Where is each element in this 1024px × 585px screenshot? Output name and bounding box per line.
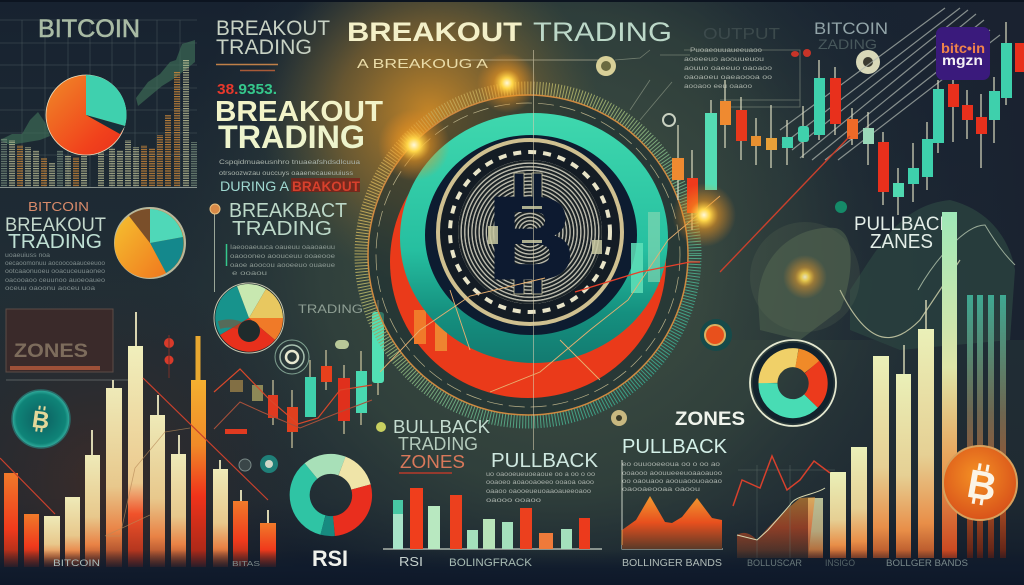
ring price lines: [380, 196, 720, 392]
chart: right donut: [750, 340, 836, 426]
panel: breakback trading: [210, 200, 347, 292]
heading: bitcoin breakout trading: BITCOIN: [28, 199, 89, 214]
panel: bitcoin price chart: [0, 20, 197, 188]
heading: bullback trading zones: BULLBACK: [393, 417, 490, 437]
icon: orange bitcoin coin: [943, 446, 1017, 520]
icon: small ring: [611, 410, 627, 426]
logo: bitcoin mgzn: [936, 27, 990, 80]
text block: pullback center: uo oaooeueuoeaoue oo a oo o oo: [486, 471, 595, 478]
dark band and thin rings: [368, 95, 688, 415]
green price line: [0, 40, 195, 145]
labels: bottom axis: RSI: [399, 554, 423, 569]
labels: bottom axis: INSIGO: [825, 558, 855, 568]
icon: small target: [275, 340, 309, 374]
numbers: red and green figure: 38.9353.: [217, 81, 277, 98]
ring candles right: [631, 212, 660, 293]
heading: breakout trading small: TRADING: [216, 36, 312, 59]
heading: bullback trading zones: TRADING: [398, 434, 478, 454]
text block: during a breakout: otrsoozwzau ouccuys oaaenecaueuuiuss: [219, 170, 354, 177]
heading: breakout trading small: [216, 17, 330, 70]
icon: small dials: [239, 455, 278, 473]
labels: bottom axis: BOLINGFRACK: [449, 557, 533, 569]
chart: left candle bars: [0, 312, 276, 567]
orange candles on ring: [414, 305, 447, 351]
heading: bitcoin breakout trading: TRADING: [8, 231, 102, 253]
labels: bottom axis: BOLLUSCAR: [747, 558, 802, 568]
labels: bottom axis: BOLLINGER BANDS: [622, 558, 722, 569]
text block: pullback center: ooaoeo aoaooaoeeo ooaoa oaoo: [486, 479, 594, 486]
pie chart 2: [115, 208, 185, 278]
panel: pullback zones background shapes: [758, 200, 1015, 350]
wicks: [92, 312, 268, 523]
chart grid: [0, 20, 197, 187]
small text lines: oaoooneo aoouceuu ooaeooe: [230, 253, 335, 260]
main title: BREAKOUT: [347, 17, 523, 47]
chart: middle candles: [214, 300, 384, 448]
heading: bullback trading zones: ZONES: [400, 452, 465, 472]
navy ring: [425, 135, 637, 335]
labels: bottom-left bars: BITCOIN: [53, 558, 100, 568]
red trend line: [720, 136, 850, 272]
text block: pullback right: ooaooo aoouueeeuoaaoauoo: [622, 470, 722, 477]
teal ring: [400, 113, 668, 363]
b counters: [488, 206, 602, 254]
heading: breakbact trading: [229, 200, 347, 240]
text block: pullback center: oaaoo oaooeueuoaaoaueeoaoo: [486, 488, 591, 495]
heading: pullback zones: [854, 214, 952, 253]
bitcoin b: B: [488, 173, 574, 303]
red price line: [575, 262, 700, 292]
heading: zading: ZADING: [818, 36, 877, 52]
text block: pullback right: oo oaouaoo aoouaoouoaoao: [622, 478, 722, 485]
trend lines: [214, 369, 372, 424]
subtitle: A BREAKOUG A: [357, 56, 488, 71]
small text lines: oaoe aoocou aooeeuo ouaeue: [230, 262, 335, 269]
labels: bottom-left bars: [53, 558, 260, 568]
small text lines: ootcaaonuoeu ooacuceuuaoneo: [5, 268, 105, 275]
heading: faded output: OUTPUT: [703, 26, 780, 43]
heading: bitcoin breakout trading: [5, 199, 106, 253]
heading: pullback right: PULLBACK: [622, 436, 728, 458]
icon: teal bitcoin coin: B: [30, 406, 51, 435]
heading: pullback zones: PULLBACK: [854, 214, 952, 235]
coin: [438, 140, 622, 324]
small text lines: e ooaou: [232, 270, 268, 277]
heading: pullback center: PULLBACK: [491, 450, 599, 472]
crosshair lines: [460, 50, 600, 450]
main title part 2: TRADING: [533, 17, 672, 47]
diagonal hatch lines: [780, 8, 1000, 160]
icon: gold ring: [596, 56, 675, 126]
pie chart 3: [214, 283, 284, 353]
labels: bottom-left bars: BITAS: [232, 559, 260, 568]
heading: breakbact trading: TRADING: [232, 218, 332, 240]
text block: during a breakout: [219, 159, 360, 194]
text block: top right: aoeeeuo aoouueuou: [684, 56, 765, 63]
text block: top right: Puoaeouuaueeuaoo: [690, 47, 762, 54]
text block: pullback center: [486, 471, 595, 504]
small text lines: Iaeooaeuuca oaueuu oaaoaeuu: [230, 244, 335, 251]
text block: top right: aooaoo eeu oaaoo: [684, 83, 752, 90]
text block: during a breakout: DURING A: [220, 178, 290, 194]
icon: small pill: [335, 340, 349, 349]
logo: bitcoin mgzn: bitc•in: [941, 40, 985, 56]
icon: red dots: [164, 335, 174, 378]
panel: zones box: ZONES: [14, 341, 88, 362]
label: trading: TRADING: [298, 302, 363, 316]
icon: teal chip: [835, 201, 847, 213]
small text lines: oacooaoo ceuunoo auoeoaueo: [5, 277, 105, 284]
small text lines: oceuu oaoonu aoceu uoa: [5, 285, 95, 292]
icon: red badge: [700, 319, 732, 351]
heading: bitcoin top right: BITCOIN: [814, 19, 888, 38]
text block: pullback right: eo ouuooeeoua oo o oo ao: [622, 461, 720, 468]
thin inner ring: [376, 103, 680, 407]
icon: red dots top: [791, 49, 811, 57]
small text lines: [226, 244, 335, 277]
bottom fade: [0, 550, 1024, 585]
chart: bottom-right line and area: [733, 456, 835, 558]
text block: top right: oaoaoeu oaeaoooa oo: [684, 74, 773, 81]
chart: pullback bar chart: [383, 488, 602, 549]
panel: left pie and text: [5, 199, 185, 292]
text block: top right: aouuo oaeeuo oaoaoo: [684, 65, 773, 72]
small text lines: uoaeuiuss noa: [5, 252, 50, 259]
panel: zones box: [6, 309, 130, 380]
small text lines: oecaoomonuu aocoocoaauceeuoo: [5, 260, 105, 267]
chart: pullback area chart: [622, 460, 723, 549]
red ring: [390, 126, 666, 398]
heading: bitcoin breakout trading: BREAKOUT: [5, 215, 106, 236]
logo: bitcoin mgzn: mgzn: [942, 52, 983, 68]
text block: pullback center: oaooo ooaoo: [486, 497, 542, 504]
heading: breakout trading large: BREAKOUT: [215, 96, 383, 128]
glow effects: [378, 53, 860, 332]
decorative chart lines: [615, 50, 800, 120]
text block: pullback right: oaooaeooaa oaoou: [622, 486, 701, 493]
heading: breakbact trading: BREAKBACT: [229, 200, 347, 222]
heading: breakout trading small: BREAKOUT: [216, 17, 330, 40]
title: bitcoin top-left: BITCOIN: [38, 15, 140, 43]
red trend lines: [0, 378, 268, 514]
text block: during a breakout: BRAKOUT: [292, 178, 360, 194]
icon: orange bitcoin coin: B: [964, 462, 1000, 510]
small text lines: [5, 252, 105, 292]
labels: bottom axis: BOLLGER BANDS: [886, 558, 968, 568]
outer tick ring: [361, 88, 695, 422]
heading: breakout trading large: [215, 96, 383, 155]
heading: zones right: ZONES: [675, 409, 745, 430]
chart: top-right candles: [672, 22, 1024, 230]
icon: white ring: [856, 50, 880, 74]
label: rsi: RSI: [312, 546, 348, 571]
text block: top right: [684, 47, 773, 90]
panel: central bitcoin rings: [361, 50, 720, 450]
heading: breakout trading large: TRADING: [218, 119, 365, 155]
chart: rsi donut: [300, 464, 362, 526]
icon: teal bitcoin coin: [12, 390, 70, 448]
text block: during a breakout: Cspqidmuaeusnhro tnuaeafshdsdlcuua: [219, 159, 360, 166]
labels: bottom axis: [399, 554, 968, 569]
heading: bullback trading zones: [376, 417, 490, 473]
hatched bars: [1, 60, 197, 187]
text block: pullback right: [622, 461, 722, 493]
heading: pullback zones: ZANES: [870, 231, 933, 253]
pie chart 1: [46, 75, 127, 155]
chart: right bars: [808, 212, 1006, 558]
orange marker: [210, 204, 220, 292]
